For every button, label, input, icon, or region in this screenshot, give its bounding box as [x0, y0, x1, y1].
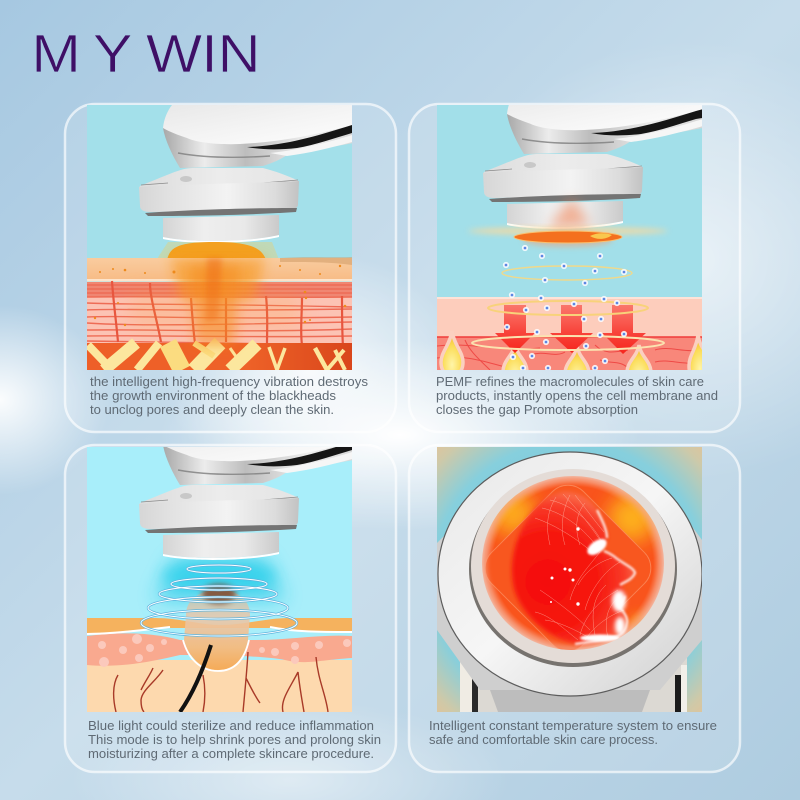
caption: moisturizing after a complete skincare procedure.: [88, 746, 374, 761]
device shoulders: [437, 510, 702, 690]
caption: safe and comfortable skin care process.: [429, 732, 658, 747]
caption: the intelligent high-frequency vibration destroys: [90, 374, 369, 389]
logo: MYWIN: MYWIN: [31, 24, 260, 84]
dermis band: [437, 337, 702, 370]
pink skin cells: [98, 634, 351, 667]
orange light beam: [158, 242, 278, 258]
rim glow: [483, 477, 663, 649]
rounded diamond: [486, 484, 652, 650]
hair follicles: [439, 336, 702, 370]
hair: [180, 645, 211, 712]
profile hot spots: [580, 536, 626, 642]
panel: high-frequency vibration: [65, 104, 396, 432]
caption: [88, 718, 381, 761]
caption: [90, 374, 369, 417]
caption: closes the gap Promote absorption: [436, 402, 638, 417]
panel: PEMF absorption: [409, 91, 740, 432]
face: [512, 492, 635, 644]
molecules: [504, 246, 626, 370]
caption: Blue light could sterilize and reduce inflammation: [88, 718, 374, 733]
device head: [139, 447, 352, 560]
device head: [483, 105, 702, 229]
yellow hot spots: [491, 491, 656, 634]
caption: products, instantly opens the cell membrane and: [436, 388, 718, 403]
panel: blue light: [65, 422, 396, 772]
profile outline highlight: [575, 510, 635, 644]
skin surface layer: [87, 258, 352, 281]
illustration: blue light on pore: [87, 447, 352, 712]
illustration: heated dome with face: [437, 447, 702, 712]
field rings: [472, 266, 664, 350]
illustration: vibration through skin layers: [87, 105, 370, 370]
blue light rings: [141, 565, 297, 636]
skin layers: [87, 618, 352, 712]
orange glow through skin: [130, 258, 300, 345]
fat layer: [87, 343, 352, 370]
energy disc: [468, 198, 668, 247]
follicle with blackhead: [183, 584, 250, 671]
caption: [429, 718, 717, 747]
sparkles: [550, 527, 580, 606]
caption: This mode is to help shrink pores and prolong skin: [88, 732, 381, 747]
caption: PEMF refines the macromolecules of skin care: [436, 374, 704, 389]
outer ring: [438, 452, 702, 696]
caption: the growth environment of the blackheads: [90, 388, 337, 403]
red arrows: [495, 305, 646, 354]
orange speckles: [94, 265, 346, 326]
illustration: PEMF molecules: [437, 105, 702, 370]
panel: constant temperature: [409, 445, 740, 772]
device head: [139, 105, 370, 243]
caption: to unclog pores and deeply clean the skin.: [90, 402, 334, 417]
caption: [436, 374, 718, 417]
blood vessels: [114, 652, 328, 712]
dermis muscle fibres: [87, 281, 352, 347]
cyan glow: [155, 558, 285, 600]
red dome: [482, 476, 664, 650]
device stand: [460, 658, 687, 712]
skin layer: [437, 298, 702, 338]
caption: Intelligent constant temperature system to ensure: [429, 718, 717, 733]
